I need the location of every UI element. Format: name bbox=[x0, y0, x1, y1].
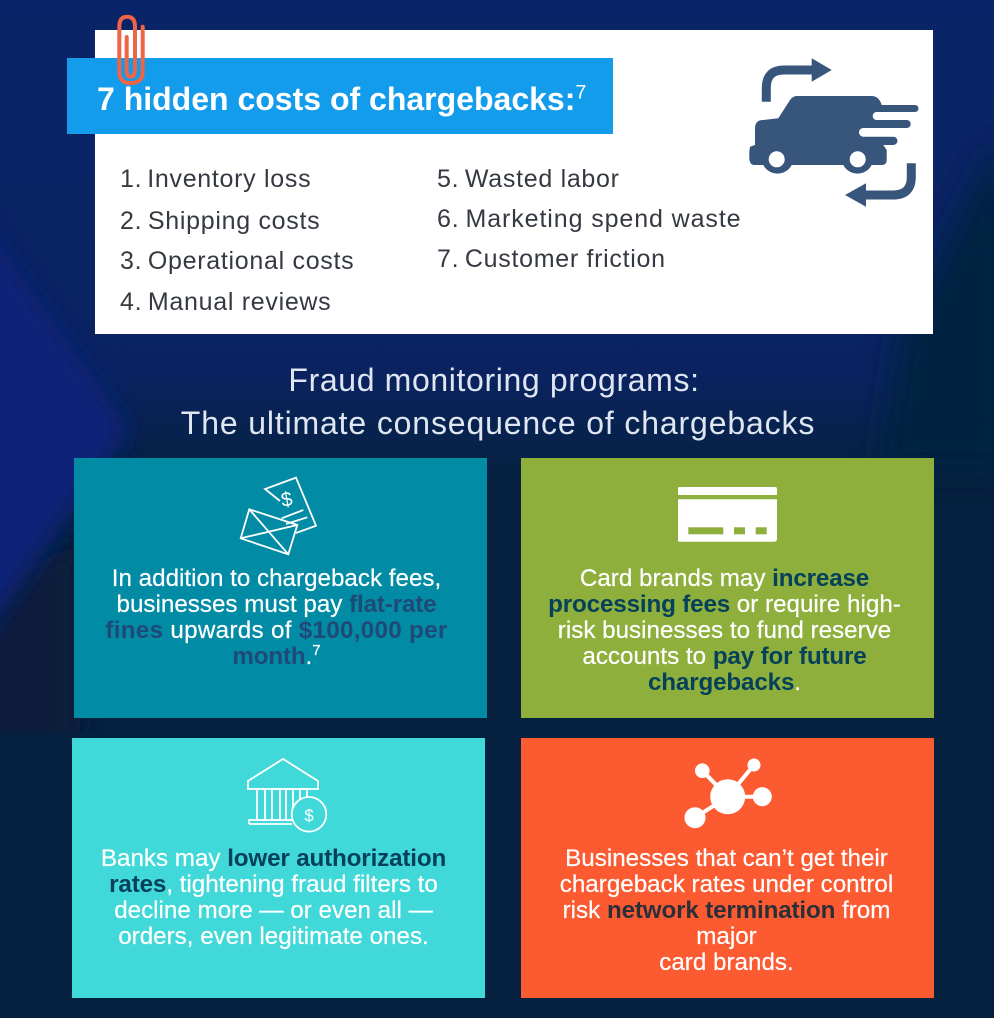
icon: credit card bbox=[678, 487, 777, 542]
icon: paper clip bbox=[117, 14, 145, 85]
text: processing fees: processing fees or require high- bbox=[548, 591, 901, 618]
text: network termination: major bbox=[696, 923, 757, 950]
panel: authorization rates bbox=[72, 738, 485, 998]
list: left column costs: 4. Manual reviews bbox=[120, 288, 331, 316]
text: fines bbox=[105, 565, 448, 670]
text: processing fees: Card brands may increase bbox=[580, 565, 869, 592]
list: right column costs bbox=[437, 165, 741, 273]
list: right column costs: 5. Wasted labor bbox=[437, 165, 620, 193]
panel: hidden costs bbox=[95, 30, 933, 334]
section heading: The ultimate consequence of chargebacks bbox=[181, 405, 815, 441]
icon: envelope and invoice: $ bbox=[279, 488, 294, 512]
text: network termination: risk network termination from bbox=[563, 897, 890, 924]
list: left column costs: 2. Shipping costs bbox=[120, 207, 320, 235]
list: right column costs: 6. Marketing spend waste bbox=[437, 205, 741, 233]
icon: envelope and invoice bbox=[240, 476, 318, 556]
text: fines: month.7 bbox=[232, 642, 321, 670]
text: processing fees: risk businesses to fund reserve bbox=[558, 617, 891, 644]
text: authorization rates: decline more — or even all — bbox=[114, 897, 433, 924]
list: left column costs bbox=[120, 165, 354, 316]
icon: network hub bbox=[684, 758, 772, 828]
text: authorization rates: Banks may lower authorization bbox=[101, 845, 446, 872]
list: left column costs: 1.Inventory loss bbox=[120, 165, 311, 193]
text: fines: businesses must pay flat-rate bbox=[117, 591, 436, 618]
panel: processing fees bbox=[521, 458, 934, 718]
heading: 7 hidden costs of chargebacks: 7 hidden costs of chargebacks:7 bbox=[97, 81, 586, 117]
text: fines: fines upwards of $100,000 per bbox=[105, 617, 448, 644]
icon: delivery van with return arrows bbox=[749, 58, 918, 207]
section heading: Fraud monitoring programs: bbox=[288, 362, 700, 398]
text: authorization rates: rates, tightening fraud filters to bbox=[109, 871, 438, 898]
text: processing fees: accounts to pay for future bbox=[582, 643, 867, 670]
text: authorization rates: orders, even legitimate ones. bbox=[118, 923, 429, 950]
icon: bank with dollar coin: $ bbox=[304, 806, 314, 825]
panel: network termination bbox=[521, 738, 934, 998]
text: fines: In addition to chargeback fees, bbox=[112, 565, 441, 592]
heading banner bbox=[67, 58, 613, 134]
text: processing fees bbox=[548, 565, 901, 696]
list: left column costs: 3. Operational costs bbox=[120, 247, 354, 275]
text: network termination: chargeback rates under control bbox=[560, 871, 893, 898]
text: authorization rates bbox=[101, 845, 446, 950]
icon: bank with dollar coin bbox=[247, 758, 328, 832]
text: network termination: Businesses that can’t get their bbox=[565, 845, 888, 872]
text: network termination: card brands. bbox=[659, 949, 794, 976]
text: processing fees: chargebacks. bbox=[648, 669, 801, 696]
list: right column costs: 7. Customer friction bbox=[437, 245, 666, 273]
text: network termination bbox=[560, 845, 893, 976]
section heading bbox=[181, 362, 815, 441]
panel: fines bbox=[74, 458, 487, 718]
